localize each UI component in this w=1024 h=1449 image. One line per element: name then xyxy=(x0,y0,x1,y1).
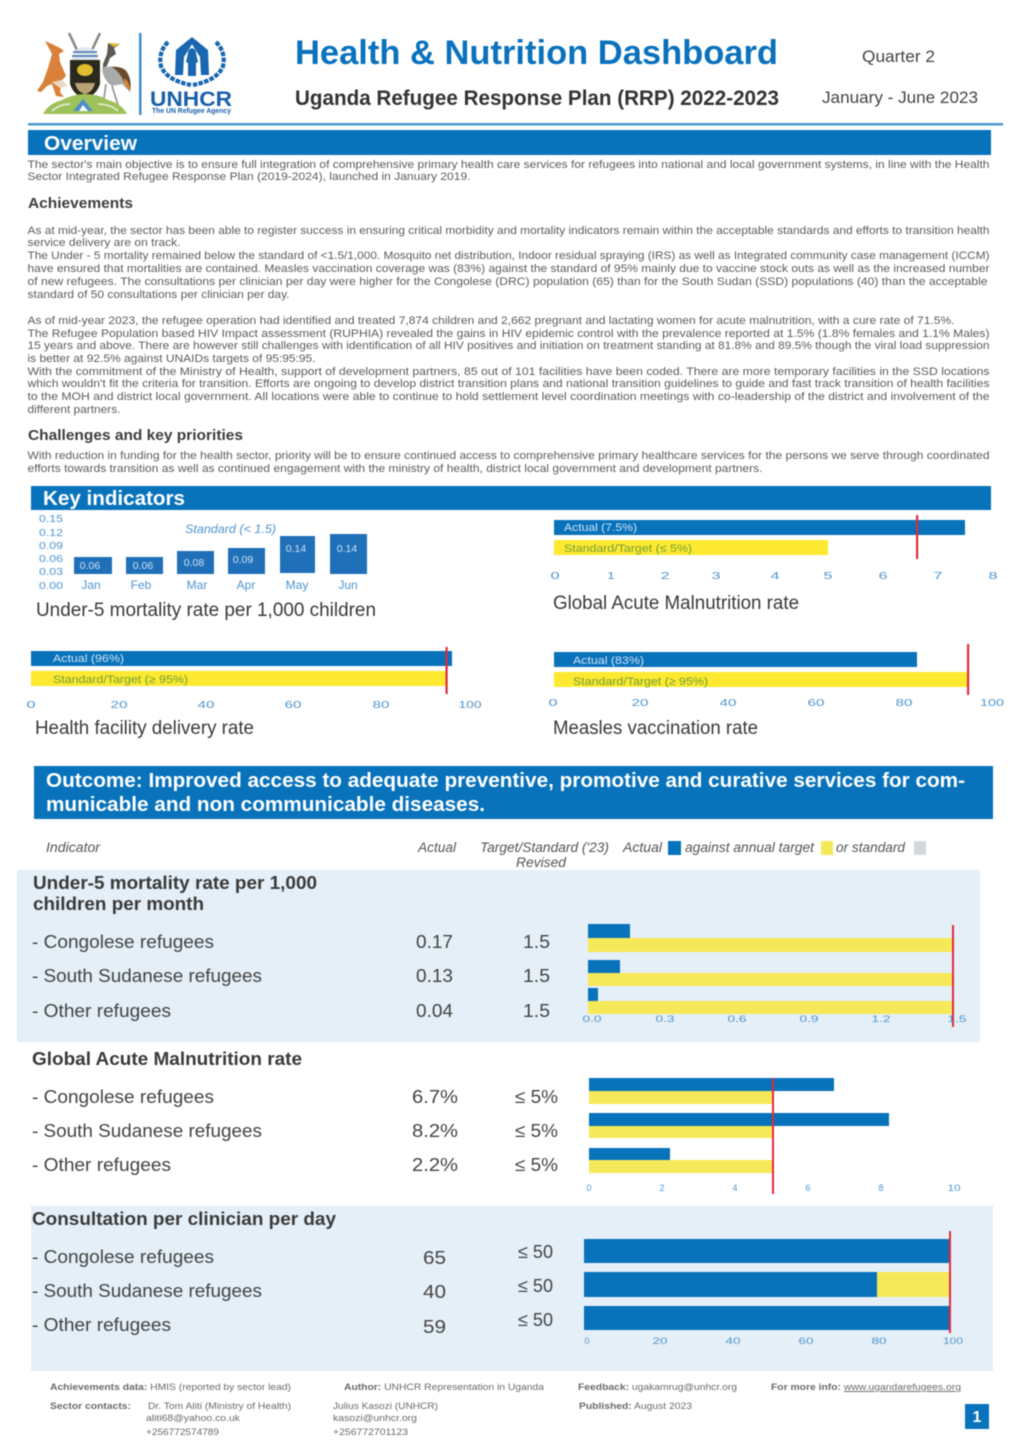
chart: global acute malnutrition: Standard/Target (≤ 5%) xyxy=(564,543,692,555)
text block: achievements: have ensured that mortalities are contained. Measles vaccination coverage was (83%) against the standard of 95% mainly due to vaccine stock outs as well as the increased number xyxy=(28,263,990,275)
panel: under-5 mortality: children per month xyxy=(33,894,204,914)
chart: health facility delivery: 0 xyxy=(26,700,36,711)
chart: measles vaccination: Standard/Target (≥ 95%) xyxy=(573,676,708,688)
text block: achievements: which wouldn't fit the criteria for transition. Efforts are ongoing to develop district transition plans and national transition guidelines to guide and fast track transition of health facilities xyxy=(26,378,989,390)
chart: under-5 mortality by month: Mar xyxy=(187,578,207,592)
panel: consultation per clinician: ≤ 50 xyxy=(518,1241,553,1262)
text block: achievements: The Under - 5 mortality remained below the standard of <1.5/1,000. Mosquito net distribution, Indoor residual spraying (IRS) as well as Integrated community case management (ICCM) xyxy=(28,250,990,262)
footer: sources and contacts: Dr. Tom Aliti (Ministry of Health) xyxy=(148,1401,291,1412)
page number xyxy=(965,1404,989,1429)
text block: achievements: to the MOH and district local government. All locations were able to continue to hold settlement level coordination meetings with co-leadership of the district and involvement of the xyxy=(28,391,990,403)
panel: global acute malnutrition: 2.2% xyxy=(412,1154,458,1175)
footer: sources and contacts: Author: UNHCR Representation in Uganda xyxy=(344,1382,545,1393)
chart: under-5 mortality by month xyxy=(39,514,367,592)
panel: global acute malnutrition xyxy=(32,1049,960,1194)
panel: global acute malnutrition: ≤ 5% xyxy=(515,1154,558,1175)
chart: measles vaccination: Actual (83%) xyxy=(573,655,644,667)
table header and legend: against annual target xyxy=(685,840,815,855)
quarter label: Quarter 2 xyxy=(862,47,935,66)
chart: under-5 mortality by month: Feb xyxy=(131,578,152,592)
bar chart: under-5 mortality: 0.6 xyxy=(728,1014,746,1024)
table header and legend: Actual xyxy=(622,840,663,855)
heading: Challenges and key priorities: Challenges and key priorities xyxy=(28,428,243,444)
table header and legend: Actual xyxy=(417,840,457,855)
bar chart: global acute malnutrition: 0 xyxy=(586,1183,592,1193)
chart: global acute malnutrition: 3 xyxy=(712,571,721,582)
panel: consultation per clinician: 59 xyxy=(423,1316,446,1337)
table header and legend: Revised xyxy=(516,855,566,870)
chart: under-5 mortality by month: 0.15 xyxy=(39,514,64,525)
table header and legend: or standard xyxy=(836,840,905,855)
bar chart: under-5 mortality: 1.5 xyxy=(948,1014,966,1024)
table header and legend xyxy=(46,840,926,870)
panel: consultation per clinician: 65 xyxy=(423,1247,446,1268)
chart: global acute malnutrition: 0 xyxy=(550,571,560,582)
bar chart: under-5 mortality: 0.0 xyxy=(582,1014,602,1024)
panel: global acute malnutrition: 6.7% xyxy=(412,1086,458,1107)
panel: consultation per clinician xyxy=(31,1206,993,1371)
bar chart: consultations: 100 xyxy=(943,1336,963,1346)
text block: achievements: service delivery are on track. xyxy=(28,237,180,249)
chart: measles vaccination: 60 xyxy=(808,698,825,709)
chart: health facility delivery xyxy=(26,647,482,711)
footer: sources and contacts: Feedback: ugakamrug@unhcr.org xyxy=(578,1382,737,1393)
panel: consultation per clinician: - Congolese refugees xyxy=(32,1246,214,1267)
bar chart: consultations: 60 xyxy=(798,1336,814,1346)
panel: under-5 mortality: Under-5 mortality rate per 1,000 xyxy=(33,873,317,893)
text block: sector objective: Sector Integrated Refugee Response Plan (2019-2024), launched in January 2019. xyxy=(28,171,470,183)
footer: sources and contacts: +256772701123 xyxy=(333,1427,408,1438)
bar chart: global acute malnutrition: 8 xyxy=(878,1183,884,1193)
text block: achievements: As of mid-year 2023, the refugee operation had identified and treated 7,874 children and 2,662 pregnant and lactating women for acute malnutrition, with a cure rate of 71.5%. xyxy=(28,315,955,327)
panel: under-5 mortality xyxy=(17,870,980,1042)
chart: health facility delivery: 80 xyxy=(372,700,390,711)
text block: achievements xyxy=(26,225,990,416)
panel: under-5 mortality: 1.5 xyxy=(523,965,550,986)
footer: sources and contacts: +256772574789 xyxy=(146,1427,219,1438)
footer: sources and contacts xyxy=(50,1382,961,1438)
logo: Uganda coat of arms xyxy=(37,33,131,114)
text block: challenges: With reduction in funding for the health sector, priority will be to ensure continued access to comprehensive primary healthcare services for the persons we serve through coordinated xyxy=(28,450,990,462)
chart: under-5 mortality by month: 0.08 xyxy=(184,557,204,569)
panel: global acute malnutrition: - South Sudanese refugees xyxy=(32,1120,262,1141)
panel: consultation per clinician: - Other refugees xyxy=(32,1314,171,1335)
panel: under-5 mortality: - South Sudanese refugees xyxy=(32,965,262,986)
chart title: under-5 mortality: Under-5 mortality rate per 1,000 children xyxy=(36,600,376,621)
logo: UNHCR emblem and wordmark xyxy=(150,37,232,115)
text block: challenges: efforts towards transition as well as continued engagement with the ministry of health, district local government and development partners. xyxy=(28,463,762,475)
chart: global acute malnutrition: 4 xyxy=(770,571,780,582)
chart: global acute malnutrition: 6 xyxy=(878,571,888,582)
text block: achievements: of new refugees. The consultations per clinician per day were higher for the Congolese (DRC) population (65) than for the South Sudan (SSD) populations (40) than the acceptable xyxy=(28,276,988,288)
logo: UNHCR emblem and wordmark: The UN Refugee Agency xyxy=(152,108,231,115)
chart: under-5 mortality by month: 0.00 xyxy=(39,581,64,592)
chart: global acute malnutrition: 1 xyxy=(607,571,616,582)
chart: health facility delivery: 20 xyxy=(110,700,128,711)
chart: under-5 mortality by month: 0.12 xyxy=(39,528,64,539)
chart: under-5 mortality by month: Jan xyxy=(81,578,101,592)
chart: under-5 mortality by month: May xyxy=(286,578,308,592)
chart: health facility delivery: 60 xyxy=(284,700,302,711)
chart: global acute malnutrition: Actual (7.5%) xyxy=(564,522,637,534)
chart title: measles vaccination: Measles vaccination rate xyxy=(553,718,758,739)
bar chart: consultations xyxy=(584,1231,963,1346)
text block: achievements: 15 years and above. There are however still challenges with identification of all HIV positives and initiation on treatment standing at 81.8% and 89.5% though the viral load suppression xyxy=(28,340,990,352)
chart: measles vaccination xyxy=(548,644,1005,709)
bar chart: under-5 mortality xyxy=(582,924,966,1027)
outcome banner: municable and non communicable diseases. xyxy=(46,794,485,816)
text block: challenges xyxy=(28,450,990,475)
chart: measles vaccination: 40 xyxy=(720,698,737,709)
panel: consultation per clinician: ≤ 50 xyxy=(518,1309,553,1330)
footer: sources and contacts: aliti68@yahoo.co.uk xyxy=(146,1413,240,1424)
bar chart: under-5 mortality: 0.3 xyxy=(656,1014,674,1024)
chart: measles vaccination: 20 xyxy=(632,698,649,709)
bar chart: global acute malnutrition: 6 xyxy=(805,1183,811,1193)
text block: achievements: standard of 50 consultations per clinician per day. xyxy=(28,289,290,301)
chart: under-5 mortality by month: 0.06 xyxy=(80,560,100,572)
chart: under-5 mortality by month: Standard (< 1.5) xyxy=(185,522,276,536)
table header and legend: Indicator xyxy=(46,840,101,855)
bar chart: consultations: 0 xyxy=(584,1336,590,1346)
text block: achievements: different partners. xyxy=(28,404,120,416)
chart title: health facility delivery: Health facility delivery rate xyxy=(35,718,254,739)
bar chart: consultations: 20 xyxy=(652,1336,668,1346)
chart: under-5 mortality by month: 0.09 xyxy=(233,554,253,566)
chart: under-5 mortality by month: 0.03 xyxy=(39,567,64,578)
text block: achievements: With the commitment of the Ministry of Health, support of development partners, 85 out of 101 facilities have been coded. There are more temporary facilities in the SSD locations xyxy=(28,366,989,378)
chart: under-5 mortality by month: 0.09 xyxy=(39,541,64,552)
chart: global acute malnutrition: 5 xyxy=(824,571,833,582)
chart: under-5 mortality by month: 0.14 xyxy=(286,543,306,555)
text block: sector objective xyxy=(28,159,990,183)
chart: under-5 mortality by month: 0.14 xyxy=(337,543,357,555)
panel: under-5 mortality: - Congolese refugees xyxy=(32,931,214,952)
panel: under-5 mortality: 0.17 xyxy=(416,931,453,952)
panel: global acute malnutrition: ≤ 5% xyxy=(515,1086,558,1107)
heading: Key indicators: Key indicators xyxy=(43,488,185,510)
bar chart: consultations: 80 xyxy=(872,1336,886,1346)
panel: global acute malnutrition: - Congolese refugees xyxy=(32,1086,214,1107)
footer: sources and contacts: Achievements data: HMIS (reported by sector lead) xyxy=(50,1382,291,1393)
panel: consultation per clinician: ≤ 50 xyxy=(518,1275,553,1296)
page number: 1 xyxy=(973,1409,982,1426)
chart: global acute malnutrition xyxy=(550,515,998,582)
bar chart: global acute malnutrition: 4 xyxy=(732,1183,738,1193)
footer: sources and contacts: Sector contacts: xyxy=(50,1401,131,1412)
text block: achievements: is better at 92.5% against UNAIDs targets of 95:95:95. xyxy=(28,353,316,365)
chart: health facility delivery: Actual (96%) xyxy=(53,653,124,665)
panel: global acute malnutrition: - Other refugees xyxy=(32,1154,171,1175)
panel: global acute malnutrition: 8.2% xyxy=(412,1120,458,1141)
chart: global acute malnutrition: 8 xyxy=(988,571,998,582)
panel: consultation per clinician: Consultation per clinician per day xyxy=(32,1209,336,1229)
chart: under-5 mortality by month: Jun xyxy=(338,578,358,592)
bar chart: under-5 mortality: 0.9 xyxy=(800,1014,818,1024)
chart: health facility delivery: 100 xyxy=(458,700,482,711)
outcome banner: Outcome: Improved access to adequate preventive, promotive and curative services for com- xyxy=(46,770,965,792)
heading: Overview xyxy=(28,130,991,155)
chart: global acute malnutrition: 7 xyxy=(934,571,943,582)
bar chart: consultations: 40 xyxy=(726,1336,740,1346)
chart: global acute malnutrition: 2 xyxy=(660,571,670,582)
text block: sector objective: The sector's main objective is to ensure full integration of comprehensive primary health care services for refugees into national and local government systems, in line with the Health xyxy=(28,159,990,171)
logo: UNHCR emblem and wordmark: UNHCR xyxy=(150,88,232,111)
bar chart: global acute malnutrition xyxy=(586,1078,960,1194)
footer: sources and contacts: Published: August 2023 xyxy=(579,1401,692,1412)
chart: under-5 mortality by month: 0.06 xyxy=(133,560,153,572)
heading: Overview: Overview xyxy=(44,133,137,155)
chart: measles vaccination: 0 xyxy=(548,698,558,709)
panel: global acute malnutrition: ≤ 5% xyxy=(515,1120,558,1141)
chart: under-5 mortality by month: 0.06 xyxy=(39,554,64,565)
chart: measles vaccination: 100 xyxy=(980,698,1005,709)
subtitle: Uganda Refugee Response Plan (RRP) 2022-2023 xyxy=(295,87,779,110)
panel: under-5 mortality: 1.5 xyxy=(523,1000,550,1021)
panel: under-5 mortality: 0.13 xyxy=(416,965,453,986)
header rule xyxy=(28,123,1003,126)
heading: Key indicators xyxy=(31,486,991,510)
bar chart: under-5 mortality: 1.2 xyxy=(872,1014,890,1024)
chart: health facility delivery: 40 xyxy=(198,700,215,711)
footer: sources and contacts: For more info: www.ugandarefugees.org xyxy=(771,1382,961,1393)
chart: health facility delivery: Standard/Target (≥ 95%) xyxy=(53,674,188,686)
footer: sources and contacts: kasozi@unhcr.org xyxy=(333,1413,417,1424)
footer: sources and contacts: Julius Kasozi (UNHCR) xyxy=(333,1401,438,1412)
panel: under-5 mortality: - Other refugees xyxy=(32,1000,171,1021)
table header and legend: Target/Standard ('23) xyxy=(480,840,609,855)
text block: achievements: As at mid-year, the sector has been able to register success in ensuring critical morbidity and mortality indicators remain within the acceptable standards and efforts to transition health xyxy=(28,225,990,237)
text block: achievements: The Refugee Population based HIV Impact assessment (RUPHIA) revealed the gains in HIV epidemic control with the prevalence reported at 1.5% (1.8% females and 1.1% Males) xyxy=(28,328,990,340)
chart title: global acute malnutrition: Global Acute Malnutrition rate xyxy=(553,593,799,614)
panel: global acute malnutrition: Global Acute Malnutrition rate xyxy=(32,1049,302,1069)
panel: consultation per clinician: - South Sudanese refugees xyxy=(32,1280,262,1301)
heading: Achievements: Achievements xyxy=(28,196,133,212)
panel: consultation per clinician: 40 xyxy=(423,1281,446,1302)
title: Health & Nutrition Dashboard xyxy=(295,34,778,72)
chart: under-5 mortality by month: Apr xyxy=(237,578,255,592)
chart: measles vaccination: 80 xyxy=(896,698,913,709)
panel: under-5 mortality: 1.5 xyxy=(523,931,550,952)
panel: under-5 mortality: 0.04 xyxy=(416,1000,453,1021)
period label: January - June 2023 xyxy=(822,88,978,107)
logo divider xyxy=(139,33,142,115)
bar chart: global acute malnutrition: 10 xyxy=(948,1183,960,1193)
outcome banner xyxy=(34,766,993,819)
bar chart: global acute malnutrition: 2 xyxy=(659,1183,665,1193)
